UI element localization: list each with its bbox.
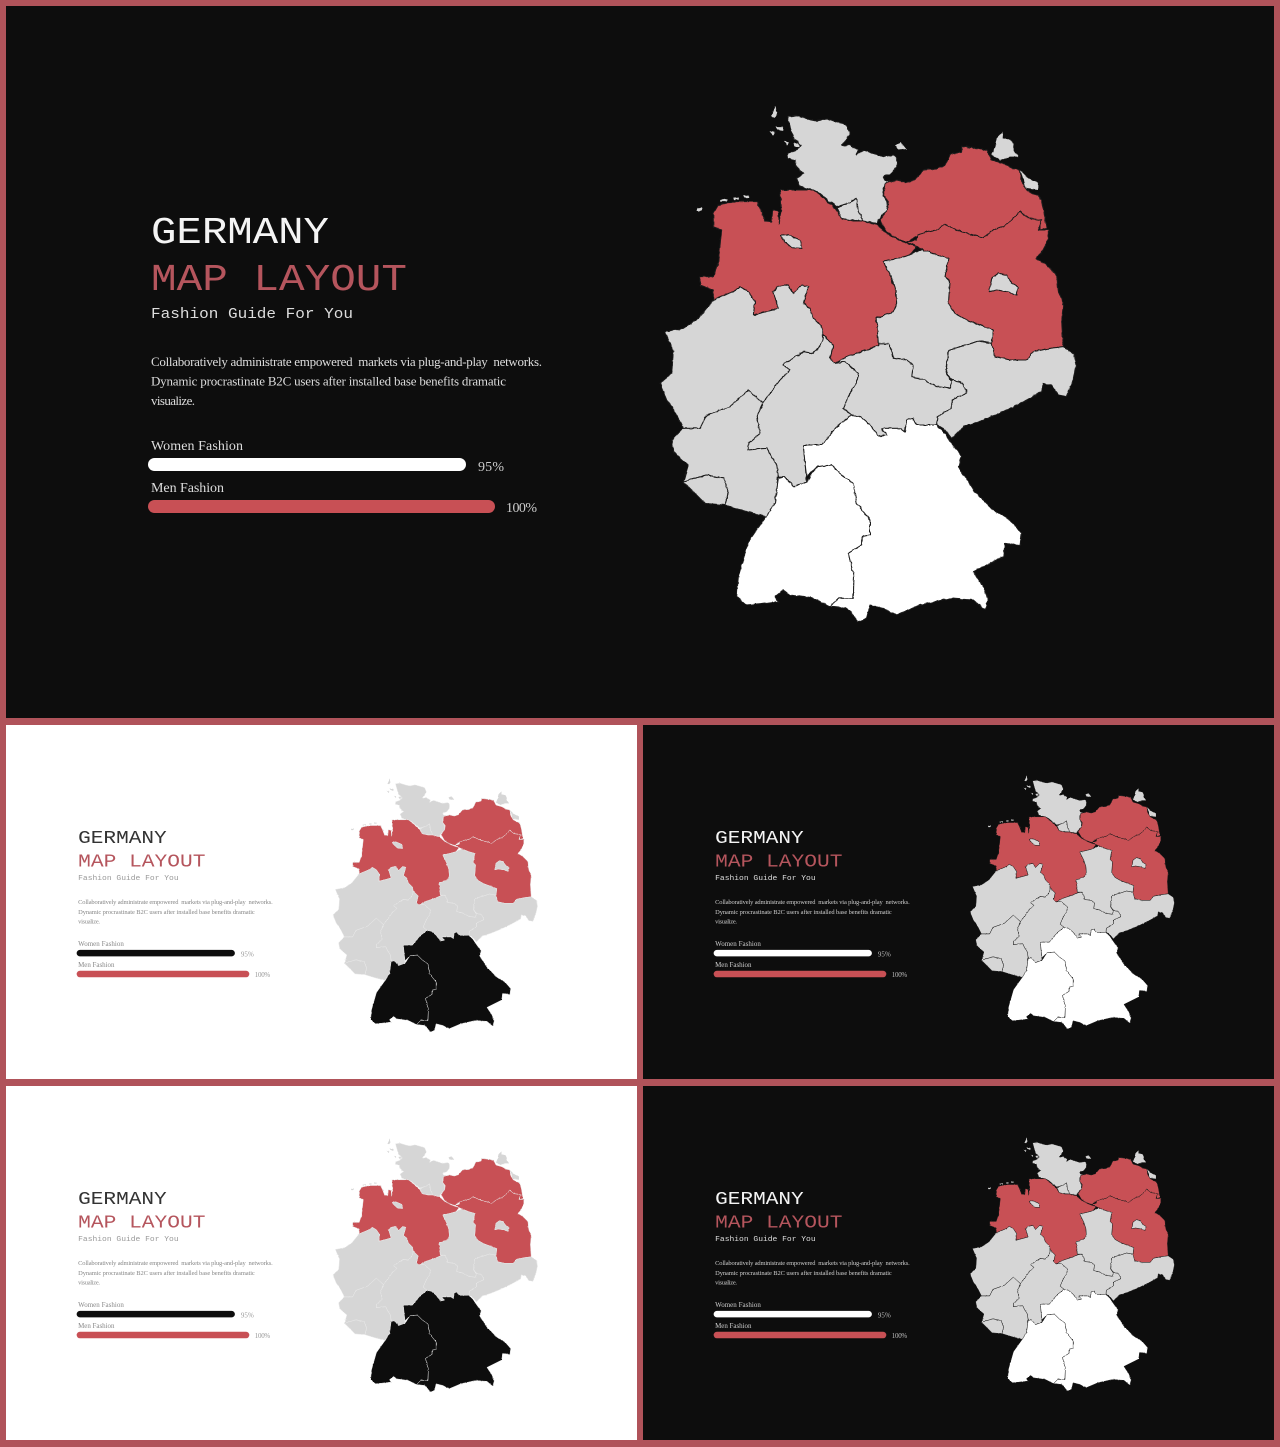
panel: light slide, top left [6,725,637,1079]
slide text: dark, bottom right: Fashion Guide For You [715,1236,816,1244]
slide text: light, top left [77,827,273,979]
state: Bavaria [803,415,1022,622]
slide text: dark, top right: GERMANY [715,827,804,849]
state: Saxony-Anhalt [877,249,993,388]
state: Berlin [989,273,1018,295]
slide text: dark, top right: Dynamic procrastinate B2C users after installed base benefits dramatic [715,909,892,916]
state: Saxony [937,341,1076,438]
body text: Dynamic procrastinate B2C users after installed base benefits dramatic [151,374,506,388]
slide text: dark, bottom right: MAP LAYOUT [715,1211,843,1233]
slide text: dark, top right: MAP LAYOUT [715,850,843,872]
state: Mecklenburg-Vorpommern [880,147,1047,242]
slide text: light, bottom left: Men Fashion [78,1322,115,1330]
state: Brandenburg [907,212,1063,360]
state: North Rhine-Westphalia [660,285,823,428]
slide text: light, bottom left: Collaboratively administrate empowered markets via plug-and-play networks. [78,1260,273,1267]
state: Bremen [781,235,802,248]
slide text: dark, top right: Collaboratively administrate empowered markets via plug-and-play networks. [715,899,910,906]
panel: light slide, bottom left [6,1086,637,1440]
panel: dark slide, top right [643,725,1274,1079]
slide text: light, bottom left: Fashion Guide For You [78,1236,179,1244]
slide text: light, top left: Dynamic procrastinate B2C users after installed base benefits dramatic [78,909,255,916]
panel: dark slide, bottom right [643,1086,1274,1440]
slide text: light, top left: 100% [255,971,270,979]
slide text: light, bottom left: 100% [255,1332,270,1340]
slide text: dark, top right: visualize. [715,919,737,926]
slide text: dark, bottom right: 100% [892,1332,907,1340]
state: Saarland [683,475,728,505]
slide text: dark, bottom right: visualize. [715,1280,737,1287]
slide text: dark, top right [714,827,910,979]
slide text: light, bottom left: visualize. [78,1280,100,1287]
slide text: light, top left: 95% [241,950,254,958]
state: Schleswig-Holstein [787,116,897,223]
state: Hesse [748,335,858,487]
slide text: light, top left: GERMANY [78,827,167,849]
body text: Collaboratively administrate empowered markets via plug-and-play networks. [151,354,542,369]
subtitle: Fashion Guide For You [151,306,353,323]
slide text: dark, top right: Fashion Guide For You [715,875,816,883]
map of Germany [660,107,1076,622]
state: Baden-Wurttemberg [737,465,870,607]
slide text: light, bottom left: 95% [241,1311,254,1319]
title: Germany: GERMANY [151,212,329,255]
value: 95%: 95% [478,460,504,475]
slide text: light, bottom left: Women Fashion [78,1301,124,1309]
value: 100%: 100% [506,501,537,516]
slide text: dark, top right: Men Fashion [715,961,752,969]
slide text: light, top left: Fashion Guide For You [78,875,179,883]
slide text: dark, bottom right: Women Fashion [715,1301,761,1309]
state: Rhineland-Palatinate [672,390,778,517]
panel: main dark slide [6,6,1274,718]
state: Lower Saxony [700,190,917,363]
slide text: light, bottom left: Dynamic procrastinate B2C users after installed base benefits dramatic [78,1270,255,1277]
slide text: light, top left: Women Fashion [78,940,124,948]
state: Thuringia [835,343,967,437]
slide text: light, bottom left [77,1188,273,1340]
slide text: light, top left: visualize. [78,919,100,926]
slide text: dark, bottom right: GERMANY [715,1188,804,1210]
slide text: light, bottom left: GERMANY [78,1188,167,1210]
slide text: light, bottom left: MAP LAYOUT [78,1211,206,1233]
bar: men fashion 100% [148,500,495,513]
body text: visualize. [151,393,195,408]
map: dark, bottom right [970,1138,1174,1391]
label: men fashion: Men Fashion [151,481,224,496]
label: women fashion: Women Fashion [151,439,243,454]
map: light, bottom left [333,1139,537,1392]
slide text: light, top left: MAP LAYOUT [78,850,206,872]
slide text: light, top left: Men Fashion [78,961,115,969]
body text [151,354,542,408]
bar: women fashion 95% [148,458,466,471]
slide text: dark, bottom right [714,1188,910,1340]
state: Hamburg [837,198,863,221]
slide text: dark, bottom right: 95% [878,1311,891,1319]
map: dark, top right [970,776,1174,1029]
slide text: dark, bottom right: Collaboratively administrate empowered markets via plug-and-play networks. [715,1260,910,1267]
islands [697,107,1038,211]
heading: Map Layout: MAP LAYOUT [151,259,407,302]
slide text: dark, top right: 95% [878,950,891,958]
slide text: dark, top right: Women Fashion [715,940,761,948]
slide text: dark, bottom right: Men Fashion [715,1322,752,1330]
slide text: dark, top right: 100% [892,971,907,979]
map: light, top left [333,779,537,1032]
slide text: light, top left: Collaboratively administrate empowered markets via plug-and-play networks. [78,899,273,906]
slide text: dark, bottom right: Dynamic procrastinate B2C users after installed base benefits dramatic [715,1270,892,1277]
